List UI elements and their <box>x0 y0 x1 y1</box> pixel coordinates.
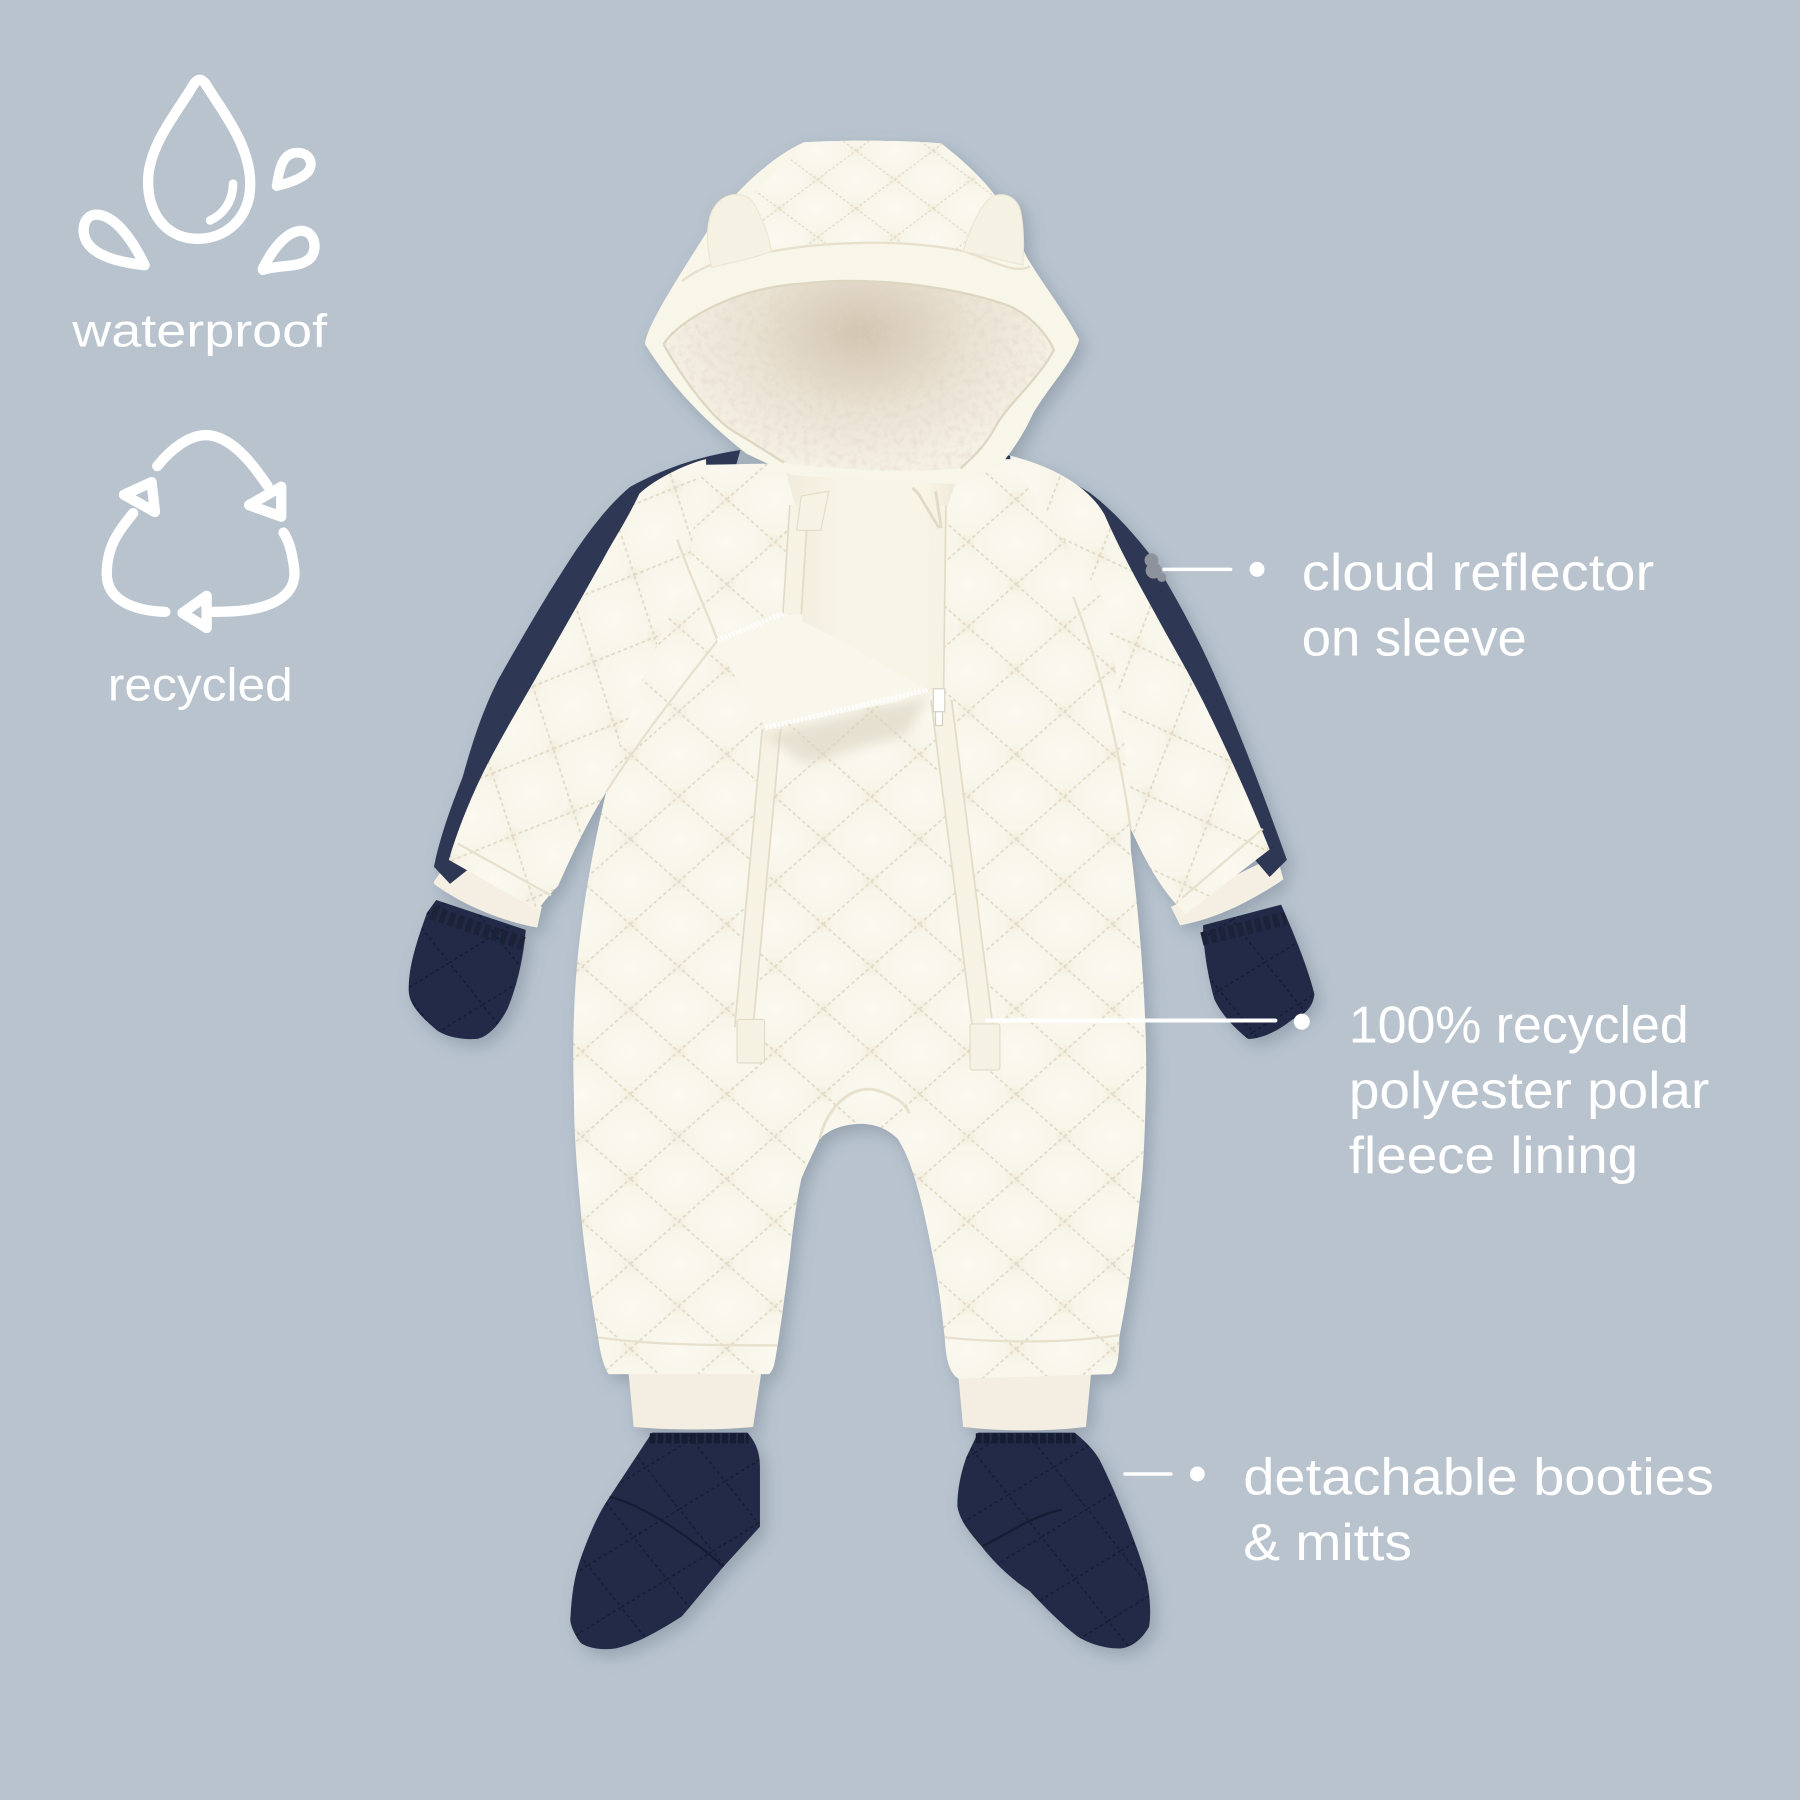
right navy sleeve stripe <box>987 450 1287 877</box>
callout: cloud reflector: cloud reflector <box>1302 543 1654 601</box>
right bootie <box>957 1433 1150 1648</box>
snowsuit illustration <box>409 141 1314 1649</box>
left leg rib cuff <box>628 1366 762 1429</box>
left ear <box>708 195 771 267</box>
icon: recycled arrows <box>107 435 295 628</box>
hood sherpa lining <box>664 281 1054 471</box>
left arm <box>449 459 712 910</box>
zipper pull <box>933 689 945 726</box>
right arm rib cuff <box>1171 855 1283 925</box>
left navy sleeve stripe <box>434 450 740 884</box>
seams and hem stitching <box>458 540 1263 1345</box>
callout: recycled polyester lining: 100% recycled <box>1349 995 1689 1053</box>
left mitten <box>409 900 526 1039</box>
right mitten <box>1202 905 1314 1039</box>
left zipper placket <box>735 505 808 1027</box>
left arm rib cuff <box>434 859 542 928</box>
label: recycled: recycled <box>108 658 293 710</box>
left bootie <box>570 1433 760 1649</box>
callout: detachable booties: & mitts <box>1243 1513 1412 1571</box>
hood brim seam <box>682 243 1030 281</box>
left pocket tab <box>737 1019 765 1063</box>
callout: detachable booties: detachable booties <box>1243 1448 1714 1506</box>
callout: recycled polyester lining: polyester polar <box>1349 1061 1709 1119</box>
callout: recycled polyester lining <box>987 995 1709 1184</box>
cloud reflector <box>1145 553 1166 582</box>
right zipper placket <box>931 505 993 1027</box>
callout: recycled polyester lining: fleece lining <box>1349 1126 1638 1184</box>
callout: detachable booties <box>1125 1448 1714 1571</box>
callout: cloud reflector: on sleeve <box>1302 608 1527 666</box>
right pocket tab <box>970 1024 1000 1070</box>
fleece chest opening <box>784 463 961 695</box>
label: waterproof: waterproof <box>71 305 327 357</box>
fleece flap <box>717 613 928 728</box>
hood <box>645 141 1079 484</box>
hood quilting <box>746 141 996 251</box>
hood opening rim <box>664 281 1054 468</box>
drawstring <box>913 488 941 528</box>
right leg rib cuff <box>957 1366 1092 1430</box>
callout: cloud reflector <box>1164 543 1654 666</box>
body <box>573 459 1146 1379</box>
right arm <box>1010 456 1270 914</box>
left neck tab <box>797 491 829 530</box>
icon: waterproof drops <box>84 80 315 270</box>
flap shadow <box>763 696 930 763</box>
right ear <box>963 195 1024 265</box>
